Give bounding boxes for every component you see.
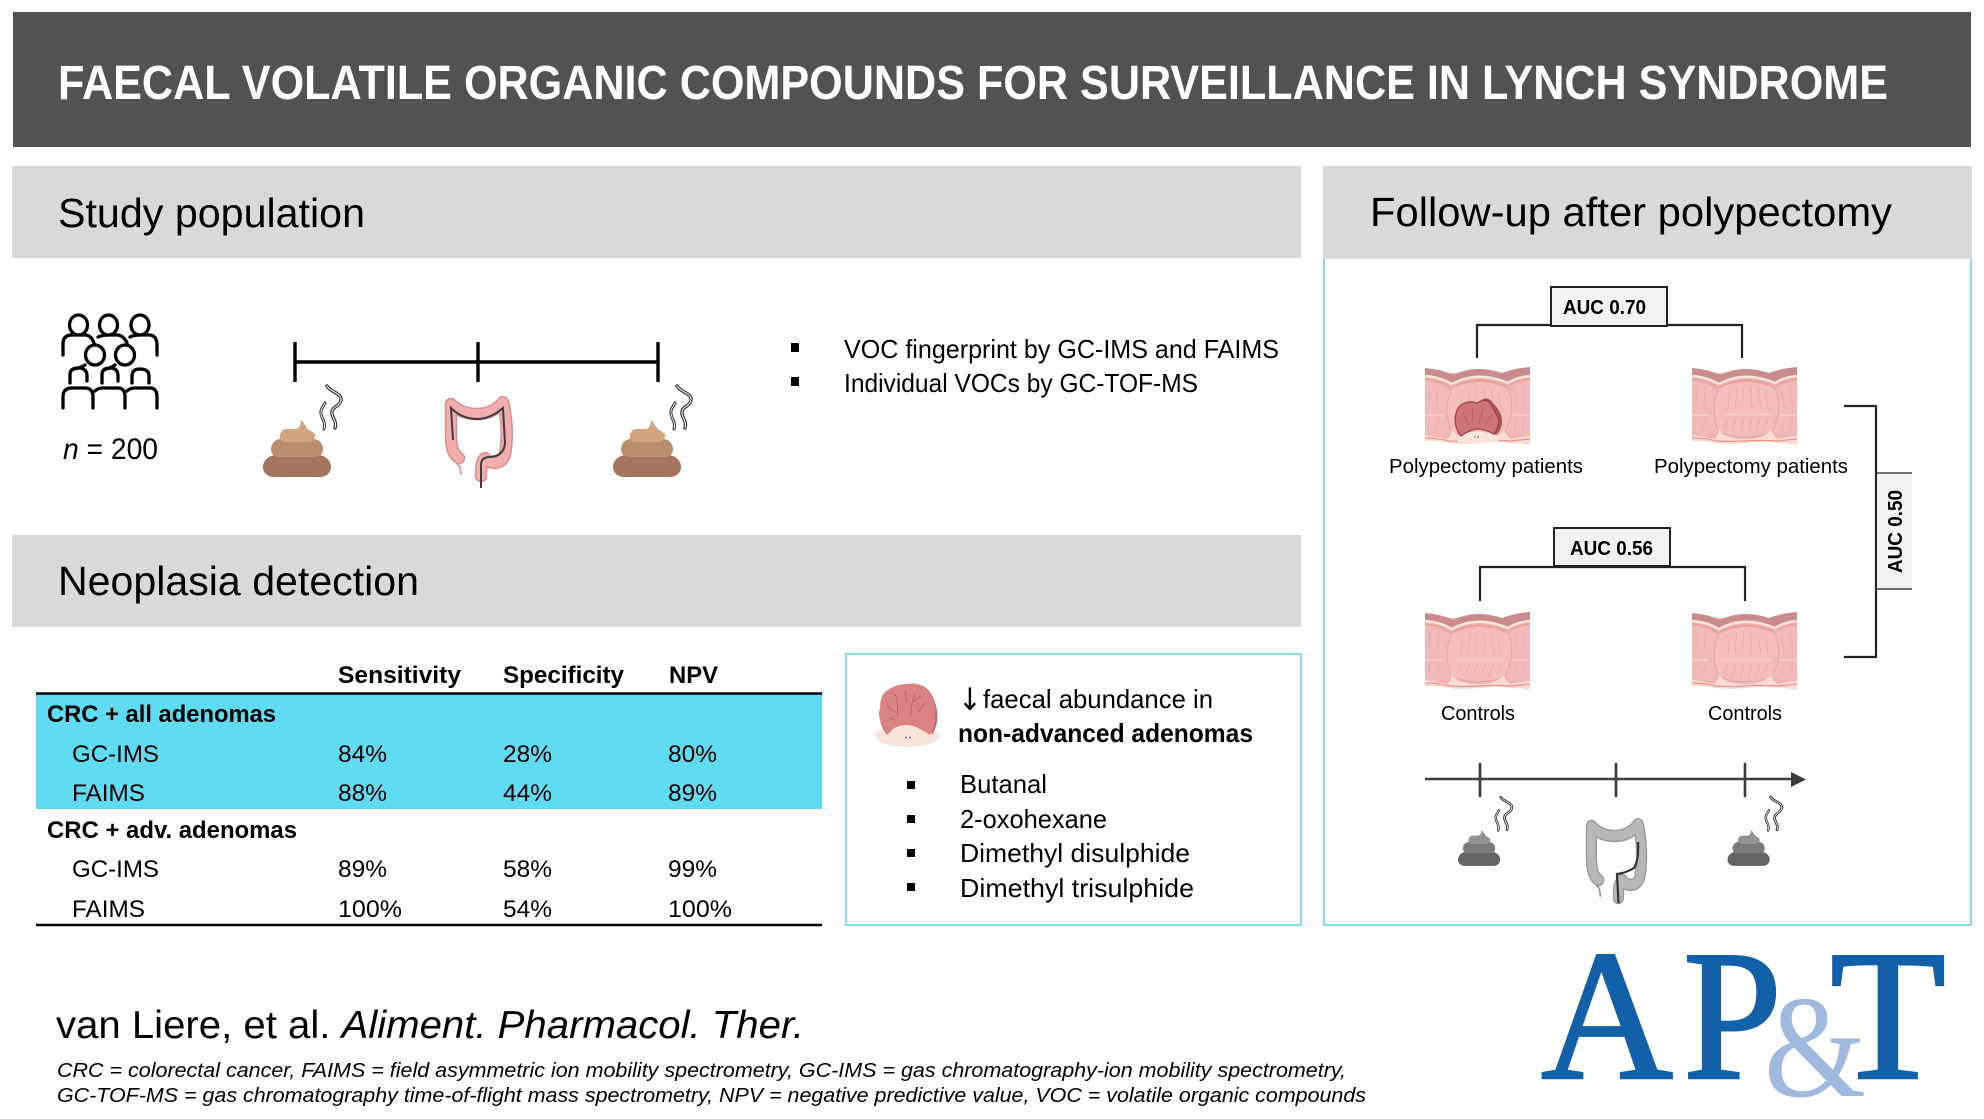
table: diagnostic accuracy: 80% xyxy=(668,741,717,768)
comparison: AUC 0.56 controls xyxy=(1480,528,1745,601)
icon: adenoma polyp xyxy=(875,684,939,747)
panel: follow-up after polypectomy xyxy=(1323,166,1972,925)
callout: faecal abundance in non-advanced adenomas: Butanal xyxy=(960,769,1047,799)
logo: AP&amp;T: A xyxy=(1541,913,1673,1119)
icon: control colon segment, follow-up xyxy=(1692,612,1797,690)
title banner xyxy=(13,12,1971,147)
label: controls follow-up: Controls xyxy=(1708,703,1782,725)
logo: AP&amp;T xyxy=(1541,913,1946,1119)
heading: follow-up after polypectomy xyxy=(1323,166,1972,259)
icon: grey colon with colonoscope xyxy=(1591,824,1642,903)
heading: follow-up after polypectomy: Follow-up after polypectomy xyxy=(1370,189,1892,235)
comparison: AUC 0.50 between groups xyxy=(1844,406,1912,657)
table: diagnostic accuracy: 44% xyxy=(503,780,552,807)
table: diagnostic accuracy: GC-IMS xyxy=(72,741,159,768)
list: VOC analysis methods: VOC fingerprint by GC-IMS and FAIMS xyxy=(844,334,1279,364)
arrow: follow-up timeline xyxy=(1425,763,1806,797)
table: diagnostic accuracy xyxy=(36,662,822,925)
comparison: AUC 0.50 between groups: AUC 0.50 xyxy=(1885,490,1907,573)
table: diagnostic accuracy: 100% xyxy=(668,896,732,923)
timeline: stool, colonoscopy, stool xyxy=(295,342,658,382)
table: diagnostic accuracy: FAIMS xyxy=(72,896,145,923)
citation: van Liere, et al. Aliment. Pharmacol. Ther. xyxy=(56,1004,804,1047)
table: diagnostic accuracy: CRC + all adenomas xyxy=(47,701,276,728)
logo: AP&amp;T: T xyxy=(1830,913,1946,1119)
comparison: AUC 0.70 polypectomy patients xyxy=(1477,287,1742,358)
table: diagnostic accuracy: 89% xyxy=(338,856,387,883)
table: diagnostic accuracy: 100% xyxy=(338,896,402,923)
callout: faecal abundance in non-advanced adenomas: Dimethyl trisulphide xyxy=(960,873,1194,903)
icon: colon segment after polypectomy xyxy=(1692,367,1797,445)
icon: colon with colonoscope xyxy=(451,402,507,488)
panel: neoplasia detection xyxy=(12,535,1301,925)
comparison: AUC 0.56 controls: AUC 0.56 xyxy=(1570,538,1653,560)
callout: faecal abundance in non-advanced adenomas: faecal abundance in xyxy=(983,684,1213,714)
table: diagnostic accuracy: Specificity xyxy=(503,662,625,689)
table: diagnostic accuracy: 99% xyxy=(668,856,717,883)
footnote: abbreviations: GC-TOF-MS = gas chromatography time-of-flight mass spectrometry, NPV = negative predictive value, VOC = volatile organic compounds xyxy=(57,1085,1366,1107)
table: diagnostic accuracy: 84% xyxy=(338,741,387,768)
callout: faecal abundance in non-advanced adenomas: non-advanced adenomas xyxy=(958,718,1253,748)
panel: study population xyxy=(12,166,1301,488)
table: diagnostic accuracy: GC-IMS xyxy=(72,856,159,883)
table: diagnostic accuracy: 58% xyxy=(503,856,552,883)
text: sample size: n = 200 xyxy=(63,433,158,466)
table: diagnostic accuracy: 89% xyxy=(668,780,717,807)
heading: study population: Study population xyxy=(58,190,365,236)
table: diagnostic accuracy: FAIMS xyxy=(72,780,145,807)
comparison: AUC 0.70 polypectomy patients: AUC 0.70 xyxy=(1563,297,1646,319)
table: diagnostic accuracy: Sensitivity xyxy=(338,662,462,689)
callout: faecal abundance in non-advanced adenomas xyxy=(846,654,1301,925)
icon: stool sample at follow-up xyxy=(1728,797,1782,866)
callout: faecal abundance in non-advanced adenomas: 2-oxohexane xyxy=(960,804,1107,834)
list: VOC analysis methods xyxy=(791,334,1279,398)
table: diagnostic accuracy: 28% xyxy=(503,741,552,768)
icon: colon segment with polyp xyxy=(1425,367,1530,445)
table: diagnostic accuracy: 54% xyxy=(503,896,552,923)
heading: neoplasia detection: Neoplasia detection xyxy=(58,558,419,604)
icon: stool sample before colonoscopy xyxy=(263,386,341,477)
icon: group of people xyxy=(63,315,157,408)
table: diagnostic accuracy: NPV xyxy=(669,662,718,689)
callout: faecal abundance in non-advanced adenomas: ↓ xyxy=(958,682,982,718)
footnote: abbreviations: CRC = colorectal cancer, FAIMS = field asymmetric ion mobility spectrometry, GC-IMS = gas chromatography-ion mobility spectrometry, xyxy=(57,1060,1346,1082)
icon: stool sample at baseline xyxy=(1458,797,1512,866)
label: controls baseline: Controls xyxy=(1441,703,1515,725)
list: VOC analysis methods: Individual VOCs by GC-TOF-MS xyxy=(844,368,1198,398)
icon: stool sample after colonoscopy xyxy=(613,386,691,477)
label: polypectomy patients (with polyp): Polypectomy patients xyxy=(1389,456,1583,478)
callout: faecal abundance in non-advanced adenomas: Dimethyl disulphide xyxy=(960,838,1190,868)
logo: AP&amp;T: P xyxy=(1683,913,1782,1119)
icon: control colon segment, baseline xyxy=(1425,612,1530,690)
footnote: abbreviations xyxy=(57,1060,1366,1107)
table: diagnostic accuracy: CRC + adv. adenomas xyxy=(47,817,297,844)
heading: study population xyxy=(12,166,1301,258)
label: polypectomy patients (after polypectomy): Polypectomy patients xyxy=(1654,456,1848,478)
table: diagnostic accuracy: 88% xyxy=(338,780,387,807)
heading: neoplasia detection xyxy=(12,535,1301,627)
